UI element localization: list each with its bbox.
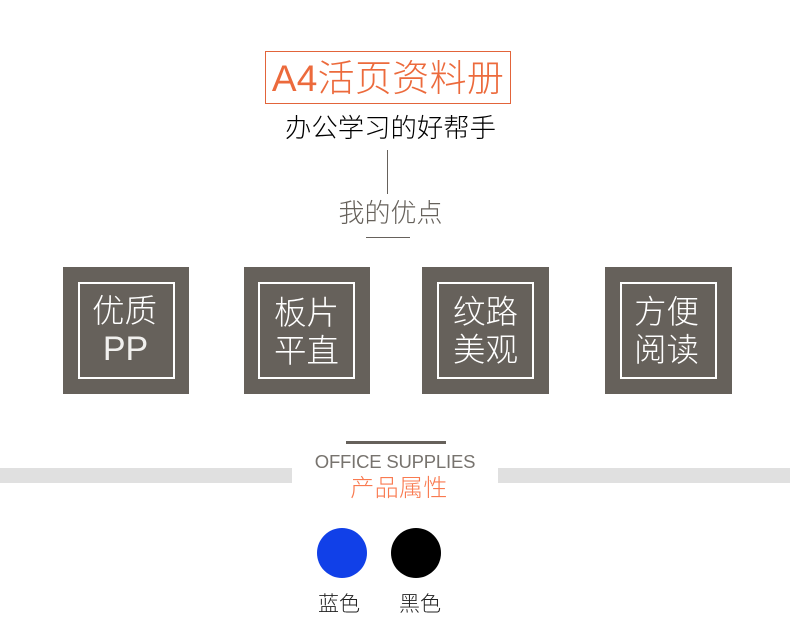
card text line 1: 板片: [274, 295, 339, 331]
vertical connector line: [387, 150, 388, 194]
section heading chinese: 产品属性: [350, 475, 448, 502]
card: easy reading: [605, 267, 732, 394]
card frame: [78, 282, 175, 379]
card text line 2: 阅读: [634, 332, 699, 368]
card text line 2: 平直: [274, 333, 339, 369]
card text line 1: 优质: [92, 293, 157, 329]
subtitle: 办公学习的好帮手: [285, 113, 496, 143]
card frame: [258, 282, 355, 379]
heading underline: [366, 237, 410, 238]
left grey band: [0, 468, 292, 483]
right grey band: [498, 468, 790, 483]
section heading english: OFFICE SUPPLIES: [315, 451, 475, 472]
card text line 1: 方便: [634, 294, 699, 330]
card: beautiful texture: [422, 267, 549, 394]
swatch: black: [391, 528, 441, 578]
card text line 2: PP: [103, 330, 148, 368]
label: blue: 蓝色: [318, 593, 360, 616]
swatch: blue: [317, 528, 367, 578]
card frame: [437, 282, 534, 379]
card frame: [620, 282, 717, 379]
card: quality PP: [63, 267, 189, 394]
section top bar: [346, 441, 446, 444]
label: black: 黑色: [399, 593, 441, 616]
card text line 1: 纹路: [453, 294, 518, 330]
heading: advantages: 我的优点: [338, 198, 442, 228]
card: flat sheet: [244, 267, 370, 394]
title box: A4活页资料册: [272, 58, 504, 99]
card text line 2: 美观: [453, 332, 518, 368]
